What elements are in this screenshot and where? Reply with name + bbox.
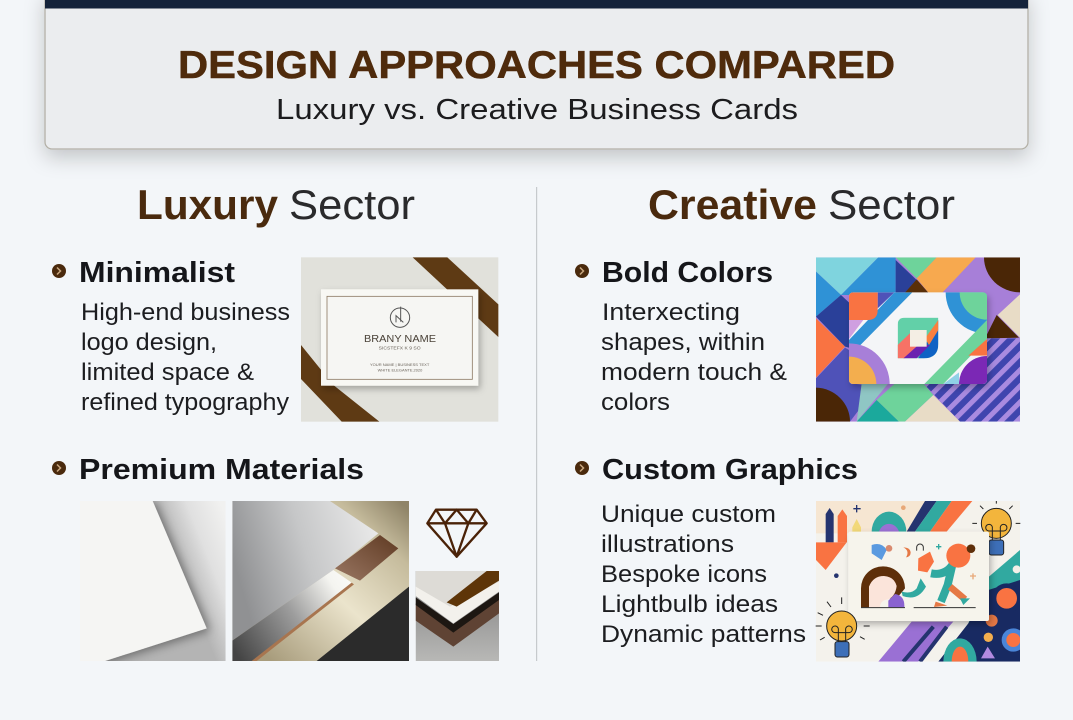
image: textured paper: [105, 501, 226, 661]
image: illustrated creative card: [816, 501, 1023, 662]
title: DESIGN APPROACHES COMPARED: [178, 44, 895, 87]
heading: luxury sector: Sector: [289, 181, 415, 228]
image: materials samples: [80, 501, 499, 661]
image: layered card stock: [416, 571, 499, 661]
icon: diamond: [427, 510, 487, 557]
text: custom graphics description: illustrations: [601, 531, 734, 558]
text: custom graphics description: [601, 501, 806, 648]
text: custom graphics description: Bespoke icons: [601, 561, 767, 588]
icon: bullet minimalist: [52, 264, 66, 278]
text: bold colors description: colors: [601, 389, 670, 416]
image: luxury business card: WHITE ELEGANTE.2020: [378, 368, 423, 372]
text: bold colors description: [601, 299, 787, 416]
image: luxury business card: BRANY NAME: [364, 334, 436, 345]
panel: luxury sector: [52, 181, 499, 661]
image: luxury business card: YOUR NAME | BUSINESS TEXT: [370, 362, 430, 367]
text: custom graphics description: Lightbulb ideas: [601, 591, 778, 618]
icon: bullet bold colors: [575, 264, 589, 278]
text: minimalist description: [81, 299, 290, 416]
heading: bold colors: Bold Colors: [602, 257, 773, 289]
text: minimalist description: High-end business: [81, 299, 290, 326]
icon: lightbulb bottom left: [816, 597, 870, 657]
panel: creative sector: [575, 181, 1028, 662]
image: brushed metal: [232, 501, 409, 661]
text: minimalist description: refined typography: [81, 389, 289, 416]
heading: luxury sector: Luxury: [137, 181, 279, 228]
text: minimalist description: logo design,: [81, 329, 217, 356]
icon: lightbulb top right: [972, 501, 1020, 555]
text: bold colors description: modern touch &: [601, 359, 787, 386]
center divider line: [536, 187, 537, 661]
text: bold colors description: Interxecting: [602, 299, 740, 326]
heading: premium materials: Premium Materials: [79, 454, 364, 486]
text: custom graphics description: Dynamic patterns: [601, 621, 806, 648]
text: minimalist description: limited space &: [81, 359, 254, 386]
heading: custom graphics: Custom Graphics: [602, 454, 858, 486]
heading: creative sector: [648, 181, 955, 228]
header panel: [45, 0, 1028, 149]
heading: creative sector: Sector: [828, 181, 955, 228]
icon: bullet premium materials: [52, 461, 66, 475]
image: luxury business card: [301, 257, 498, 422]
image: geometric colorful card: [816, 257, 1020, 422]
text: bold colors description: shapes, within: [601, 329, 765, 356]
icon: bullet custom graphics: [575, 461, 589, 475]
text: custom graphics description: Unique custom: [601, 501, 776, 528]
heading: creative sector: Creative: [648, 181, 817, 228]
illustration: two characters: [861, 544, 976, 608]
heading: minimalist: Minimalist: [79, 257, 235, 289]
image: luxury business card: SICSTEFX K 9 SO: [379, 345, 421, 350]
subtitle: Luxury vs. Creative Business Cards: [276, 94, 798, 126]
heading: luxury sector: [137, 181, 415, 228]
